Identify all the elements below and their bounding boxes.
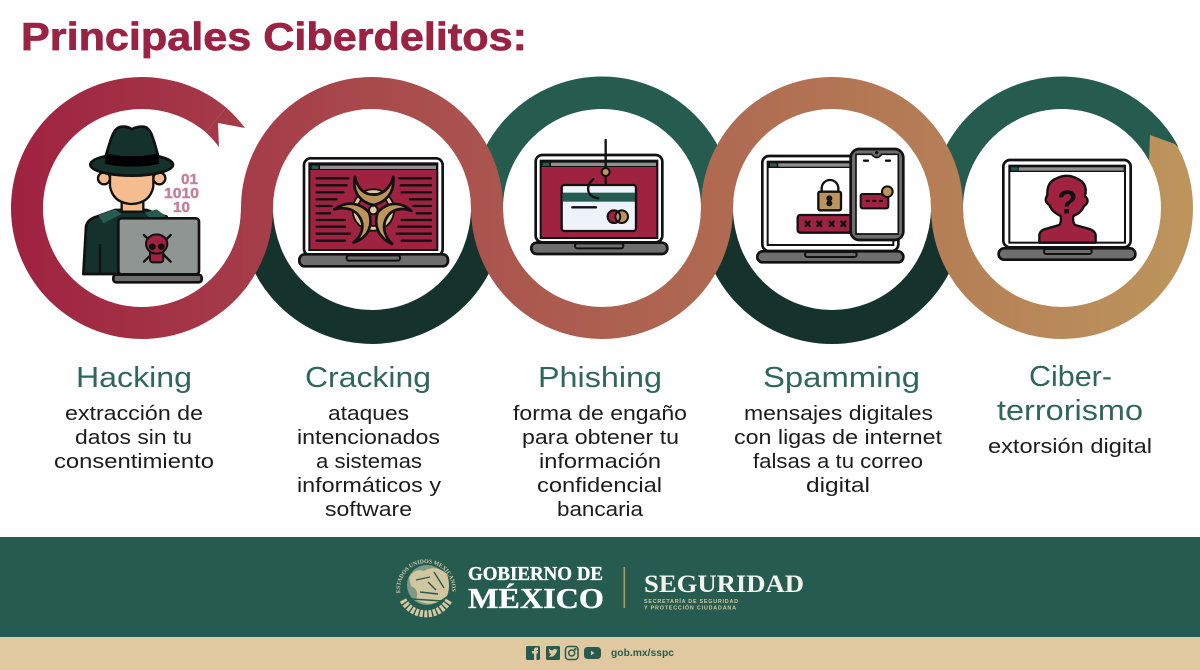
logo: seguridad xyxy=(644,571,804,612)
description: spamming xyxy=(734,403,943,497)
icon: instagram xyxy=(566,646,578,660)
collar xyxy=(98,209,167,223)
binary digits: 1010 xyxy=(164,186,199,202)
ribbon start swallowtail xyxy=(206,108,245,147)
green arc under spamming xyxy=(717,212,947,327)
laptop base xyxy=(113,275,202,282)
description: cracking: software xyxy=(325,499,412,521)
logo: gobierno de mexico xyxy=(468,564,604,615)
icon: hacker xyxy=(83,127,202,282)
icon: spamming laptop and phone xyxy=(757,149,903,262)
description: phishing: forma de engaño xyxy=(513,403,687,425)
description: ciberterrorismo: extorsión digital xyxy=(988,436,1152,458)
logo: seguridad: SECRETARÍA DE SEGURIDAD xyxy=(644,597,738,605)
gradient ribbon xyxy=(27,93,1177,323)
icon: biohazard laptop xyxy=(299,158,448,266)
heading: ciberterrorismo: Ciber- xyxy=(1029,361,1112,393)
fishing line and hook xyxy=(602,140,609,185)
column: hacking xyxy=(54,362,214,473)
green arc above ciberterrorismo xyxy=(947,93,1164,208)
heading: cracking: Cracking xyxy=(305,362,431,394)
description: phishing: confidencial xyxy=(537,475,662,497)
description: spamming: con ligas de internet xyxy=(734,427,943,449)
silhouette xyxy=(1039,176,1096,243)
credit card xyxy=(562,185,636,231)
hacker body xyxy=(83,210,167,274)
footer green band xyxy=(0,537,1200,637)
description: phishing: bancaria xyxy=(557,499,644,521)
laptop lid xyxy=(118,218,199,274)
heading: hacking: Hacking xyxy=(76,362,192,394)
seal lettering: ESTADOS UNIDOS MEXICANOS xyxy=(396,559,456,594)
neck xyxy=(122,200,143,212)
logo: gobierno de mexico: MÉXICO xyxy=(468,582,604,615)
description: cracking: ataques xyxy=(328,403,409,425)
binary digits: 10 xyxy=(173,200,190,216)
password field xyxy=(798,215,854,233)
description: hacking: consentimiento xyxy=(54,451,214,473)
description: hacking: datos sin tu xyxy=(75,427,192,449)
text lines on screen xyxy=(317,178,431,241)
icon: facebook xyxy=(526,646,540,660)
column: spamming xyxy=(734,362,943,497)
description: cracking: intencionados xyxy=(297,427,440,449)
website url: gob.mx/sspc xyxy=(611,647,674,659)
description: spamming: mensajes digitales xyxy=(744,403,933,425)
biohazard symbol xyxy=(334,177,412,244)
green arc under cracking xyxy=(257,212,487,327)
icon: twitter xyxy=(546,646,560,660)
padlock xyxy=(822,180,838,193)
green arc above phishing xyxy=(487,93,717,208)
national seal xyxy=(396,559,456,618)
description: spamming: falsas a tu correo xyxy=(753,451,923,473)
heading: ciberterrorismo: terrorismo xyxy=(997,395,1143,427)
footer divider xyxy=(624,567,625,608)
heading: phishing: Phishing xyxy=(538,362,662,394)
icon: anonymous profile laptop xyxy=(999,160,1135,260)
face xyxy=(110,173,153,204)
icon: youtube xyxy=(584,647,601,659)
binary digits xyxy=(164,172,199,216)
title: Principales Ciberdelitos: xyxy=(21,16,527,59)
logo: seguridad: SEGURIDAD xyxy=(644,571,804,598)
description: hacking xyxy=(54,403,214,473)
column: phishing xyxy=(513,362,687,521)
description: cracking: a sistemas xyxy=(316,451,422,473)
ribbon chain of five rings xyxy=(27,93,1178,327)
footer beige band xyxy=(0,637,1200,670)
ears xyxy=(98,172,165,184)
column: cracking xyxy=(297,362,441,521)
description: cracking: informáticos y xyxy=(297,475,441,497)
description: phishing: para obtener tu xyxy=(522,427,679,449)
description: spamming: digital xyxy=(806,475,870,497)
logo: seguridad: Y PROTECCIÓN CIUDADANA xyxy=(644,604,736,612)
logo: gobierno de mexico: GOBIERNO DE xyxy=(468,564,603,585)
description: phishing xyxy=(513,403,687,521)
heading: ciberterrorismo xyxy=(997,361,1143,427)
description: phishing: información xyxy=(539,451,661,473)
hat xyxy=(90,127,173,176)
binary digits: 01 xyxy=(181,172,198,188)
skull xyxy=(144,235,171,262)
column: ciberterrorismo xyxy=(988,361,1152,458)
phone xyxy=(851,149,903,240)
description: cracking xyxy=(297,403,441,521)
ribbon end arrow tip xyxy=(1149,135,1178,162)
question mark: ? xyxy=(1057,184,1078,221)
icon: phishing laptop xyxy=(531,140,667,254)
heading: spamming: Spamming xyxy=(763,362,920,394)
wreath xyxy=(403,600,449,614)
description: hacking: extracción de xyxy=(65,403,203,425)
white ring interiors xyxy=(43,109,1161,307)
eagle xyxy=(407,565,449,605)
